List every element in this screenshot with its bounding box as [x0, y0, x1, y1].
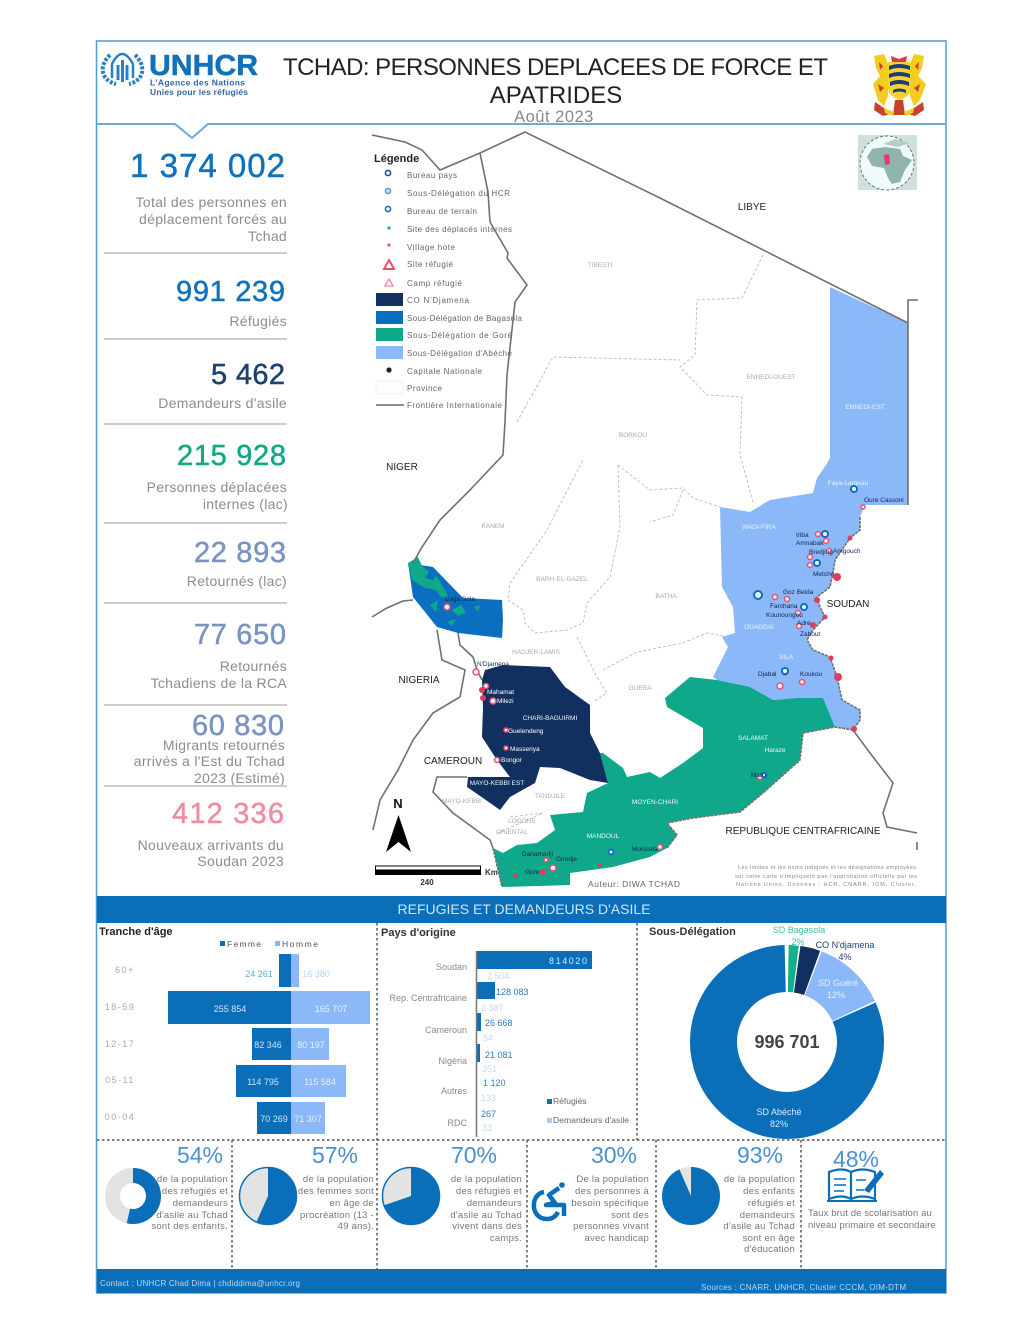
panel: 57% femmes: des femmes sont — [298, 1186, 374, 1197]
icon: open book and pen — [827, 1170, 884, 1201]
map disclaimer: sur cette carte n'impliquent pas l'approbation officielle par les — [735, 874, 917, 880]
bar values: 80 197 — [297, 1040, 325, 1050]
stat: migrants retournés: 60 830 — [192, 710, 284, 742]
header — [97, 50, 946, 138]
donut labels: 2% — [791, 937, 805, 947]
donut labels: 12% — [827, 990, 845, 1000]
panel: 48% scolarisation: 48% — [833, 1146, 879, 1172]
age labels — [105, 965, 135, 1122]
title: TCHAD: PERSONNES DEPLACEES DE FORCE ET — [283, 54, 828, 81]
header rule with chevron — [97, 124, 946, 138]
map disclaimer: Nations Unies. Données : HCR, CNARR, IOM, Cluster. — [736, 882, 916, 888]
title: APATRIDES — [490, 82, 622, 109]
stat: total: déplacement forcés au — [139, 211, 287, 227]
panel: 93% éducation: d'asile au Tchad — [723, 1221, 795, 1232]
bar values: 26 668 — [485, 1018, 513, 1028]
stat: personnes déplacées internes — [147, 440, 288, 512]
province labels: MAYO-KEBBI EST — [470, 780, 524, 787]
donut labels: SD Guéré — [818, 978, 858, 988]
age labels: 18-59 — [105, 1002, 135, 1012]
chart legend: Femme — [227, 939, 261, 949]
province labels: WADI-FIRA — [742, 524, 777, 531]
stat: retournés RCA — [151, 619, 287, 691]
chart: pays d'origine — [381, 927, 629, 1137]
country labels: Nigéria — [438, 1056, 467, 1066]
region: Sous-Délégation de Goré — [493, 677, 835, 887]
town labels: Gondje — [556, 856, 577, 863]
panel: 54% enfants: demandeurs — [173, 1198, 228, 1209]
country labels: CAMEROUN — [424, 756, 482, 767]
town labels: Koukou — [800, 671, 822, 678]
legend: Capitale Nationale — [407, 367, 483, 376]
panel: 54% enfants — [112, 1142, 228, 1232]
province labels: Faya-Largeau — [828, 480, 869, 487]
bar values — [481, 956, 587, 1133]
stat: retournés RCA: 77 650 — [194, 619, 286, 651]
panel: 30% handicap: De la population — [576, 1174, 649, 1185]
bar values: 21 081 — [485, 1050, 513, 1060]
bar values: 115 584 — [304, 1077, 336, 1087]
town labels: Djabal — [758, 671, 777, 678]
province labels: SILA — [779, 654, 794, 661]
panel: 57% femmes: en âge de — [329, 1198, 374, 1209]
legend: Village hote — [407, 243, 456, 252]
bar values: 71 307 — [294, 1114, 322, 1124]
province labels — [442, 262, 885, 840]
age labels: 60+ — [115, 965, 135, 975]
legend — [374, 153, 523, 410]
panel: 93% éducation: demandeurs — [740, 1210, 795, 1221]
donut labels: 82% — [770, 1119, 788, 1129]
country labels: SOUDAN — [827, 599, 869, 610]
panel: 70% camps: des réfugiés et — [456, 1186, 522, 1197]
panel: 30% handicap — [534, 1142, 649, 1244]
province labels: GUERA — [628, 685, 652, 692]
panel: 54% enfants: 54% — [177, 1142, 223, 1168]
country labels: Soudan — [436, 962, 467, 972]
north arrow — [386, 796, 411, 852]
icon: coat of arms of Chad — [873, 54, 926, 116]
panel: 93% éducation: d'éducation — [744, 1244, 795, 1255]
province labels: LOGONE — [508, 818, 537, 825]
scale bar: 240 — [420, 878, 434, 887]
town labels: Goz Beida — [783, 589, 814, 596]
province labels: BATHA — [655, 593, 677, 600]
region: CO N'Djamena — [467, 665, 608, 810]
panel: 93% éducation: 93% — [737, 1142, 783, 1168]
bar values: 165 707 — [315, 1004, 347, 1014]
country labels: LIBYE — [738, 202, 766, 213]
panel: 57% femmes: 57% — [312, 1142, 358, 1168]
legend: Province — [407, 384, 443, 393]
town labels — [445, 497, 904, 876]
legend: CO N'Djamena — [407, 296, 470, 305]
north arrow: N — [393, 796, 403, 811]
footer — [97, 1269, 946, 1293]
country labels: RDC — [448, 1118, 467, 1128]
town labels: Maro — [751, 772, 766, 779]
bar values: 1 120 — [483, 1078, 506, 1088]
stat: retournés lac: Retournés (lac) — [187, 573, 287, 589]
icon: UNHCR emblem — [103, 54, 142, 84]
pie chart — [662, 1167, 720, 1225]
province labels: MANDOUL — [587, 833, 620, 840]
icon: inset globe locator — [858, 135, 917, 190]
stat: réfugiés — [176, 276, 287, 329]
town labels: Goré — [525, 869, 540, 876]
province labels: OUADDAI — [744, 624, 774, 631]
legend: Site des déplacés internes — [407, 225, 512, 234]
province boundaries — [498, 255, 763, 833]
title — [283, 54, 828, 109]
stat: total — [130, 147, 287, 244]
province labels: BORKOU — [619, 432, 647, 439]
age labels: 12-17 — [105, 1039, 135, 1049]
pie chart — [240, 1168, 296, 1224]
province labels: MAYO-KEBBI — [442, 798, 482, 805]
chart: pays d'origine: Pays d'origine — [381, 927, 456, 939]
panel: 48% scolarisation: Taux brut de scolarisation au — [808, 1208, 932, 1219]
bar values: 351 — [482, 1064, 497, 1074]
country labels: NIGER — [386, 462, 418, 473]
panel: 57% femmes — [240, 1142, 374, 1232]
town labels: Amgouch — [833, 548, 861, 555]
legend: Camp réfugié — [407, 279, 463, 288]
province labels: HADJER-LAMIS — [512, 649, 560, 656]
stat: nouveaux arrivants: Nouveaux arrivants du — [138, 837, 284, 853]
panel: 30% handicap: 30% — [591, 1142, 637, 1168]
stat: migrants retournés: arrivés a l'Est du Tchad — [134, 753, 285, 769]
legend: Sous-Délégation d'Abéché — [407, 349, 513, 358]
panel: 54% enfants: des réfugiés et — [162, 1186, 228, 1197]
subtitle: Août 2023 — [514, 108, 594, 126]
panel: 30% handicap: personnes vivant — [573, 1221, 649, 1232]
bar values — [214, 969, 347, 1124]
panel: 70% camps: vivent dans des — [452, 1221, 522, 1232]
stat: demandeurs d'asile — [158, 359, 287, 411]
donut labels: SD Abéché — [756, 1107, 802, 1117]
chart legend: Homme — [282, 939, 318, 949]
panel: 48% scolarisation — [808, 1146, 936, 1231]
stat: personnes déplacées internes: Personnes déplacées — [147, 479, 287, 495]
stat: total: Total des personnes en — [136, 194, 287, 210]
stat: retournés RCA: Retournés — [220, 658, 287, 674]
stat: nouveaux arrivants — [138, 798, 284, 869]
stat: demandeurs d'asile: Demandeurs d'asile — [158, 395, 287, 411]
footer: Contact : UNHCR Chad Dima | chdiddima@unhcr.org — [100, 1279, 300, 1288]
panel: 70% camps — [382, 1142, 522, 1244]
town labels: Farchana — [770, 603, 798, 610]
stat: nouveaux arrivants: 412 336 — [172, 798, 284, 830]
region: Sous-Délégation d'Abéché — [713, 287, 908, 730]
chart legend: Demandeurs d'asile — [553, 1115, 629, 1125]
town labels: Bongor — [501, 757, 523, 764]
panel: 54% enfants: de la population — [157, 1174, 228, 1185]
panel: 93% éducation: réfugiés et — [748, 1198, 795, 1209]
chart: tranche d'âge — [99, 926, 370, 1134]
country labels — [389, 962, 467, 1128]
section banner: REFUGIES ET DEMANDEURS D'ASILE — [398, 901, 650, 917]
bar values: 114 795 — [247, 1077, 279, 1087]
horizontal bars — [476, 951, 592, 1137]
scale bar: Km — [485, 868, 498, 877]
donut total: 996 701 — [754, 1032, 820, 1052]
province labels: MOYEN-CHARI — [632, 799, 678, 806]
country labels: REPUBLIQUE CENTRAFRICAINE — [725, 826, 881, 837]
donut chart — [112, 1176, 154, 1216]
province labels: SALAMAT — [738, 735, 768, 742]
international borders — [372, 132, 918, 887]
chart: tranche d'âge: Tranche d'âge — [99, 926, 173, 938]
logo: UNHCR — [103, 50, 258, 97]
panel: 57% femmes: de la population — [303, 1174, 374, 1185]
panel: 70% camps: camps. — [490, 1233, 522, 1244]
panel: 70% camps: demandeurs — [467, 1198, 522, 1209]
legend: Site réfugié — [407, 260, 454, 269]
town labels: Oure Cassoni — [864, 497, 904, 504]
bar values: 24 261 — [245, 969, 273, 979]
stat: migrants retournés — [134, 710, 285, 786]
chart legend: Réfugiés — [553, 1096, 587, 1106]
page frame — [96, 41, 946, 1293]
stat: total: 1 374 002 — [130, 147, 285, 184]
town labels: Bredjing — [809, 549, 833, 556]
town labels: Guelendeng — [508, 728, 544, 735]
town labels: Milezi — [497, 698, 514, 705]
legend: Bureau de terrain — [407, 207, 477, 216]
stat: personnes déplacées internes: 215 928 — [177, 440, 286, 472]
region: Sous-Délégation de Bagasola — [408, 557, 503, 638]
panel: 93% éducation: des enfants — [743, 1186, 795, 1197]
panel: 30% handicap: avec handicap — [584, 1233, 649, 1244]
town labels: Baga Sola — [445, 596, 475, 603]
town labels: Amnabak — [796, 540, 824, 547]
donut labels: CO N'djamena — [816, 940, 874, 950]
province labels: Haraze — [765, 747, 786, 754]
legend: Légende — [374, 153, 419, 165]
province labels: TIBESTI — [588, 262, 612, 269]
bar values: 70 269 — [260, 1114, 288, 1124]
chart: sous-délégation donut: Sous-Délégation — [649, 926, 736, 938]
panel: key figures — [104, 147, 288, 869]
legend: Bureau pays — [407, 171, 457, 180]
scale bar — [375, 866, 498, 887]
province labels: KANEM — [481, 523, 505, 530]
town labels: Kounoungou — [766, 612, 803, 619]
pyramid bars — [168, 954, 370, 1134]
stat: total: Tchad — [248, 228, 287, 244]
legend: Sous-Délégation du HCR — [407, 189, 510, 198]
panel: 48% scolarisation: niveau primaire et secondaire — [808, 1220, 936, 1231]
town labels: Danamadji — [522, 851, 553, 858]
province labels: ENNEDI-OUEST — [746, 374, 796, 381]
bar values: 54 — [483, 1033, 493, 1043]
logo: UNHCR: L'Agence des Nations — [150, 78, 245, 88]
stat: retournés RCA: Tchadiens de la RCA — [151, 675, 287, 691]
stat: nouveaux arrivants: Soudan 2023 — [197, 853, 284, 869]
author credit: Auteur: DIWA TCHAD — [588, 879, 680, 889]
bar values: 2 387 — [481, 1003, 504, 1013]
donut labels: 4% — [838, 952, 852, 962]
donut segments — [714, 968, 860, 1116]
dividers — [97, 923, 946, 1269]
chart legend — [220, 939, 318, 949]
pie chart — [382, 1168, 440, 1224]
stat: migrants retournés: 2023 (Estimé) — [194, 770, 285, 786]
panel: 70% camps: 70% — [451, 1142, 497, 1168]
legend: Sous-Délégation de Goré — [407, 331, 513, 340]
panel: 93% éducation — [662, 1142, 795, 1255]
town labels: Massenya — [510, 746, 540, 753]
stat: réfugiés: Réfugiés — [229, 313, 287, 329]
bar values: 33 — [482, 1123, 492, 1133]
panel: 70% camps: d'asile au Tchad — [450, 1210, 522, 1221]
stat: migrants retournés: Migrants retournés — [163, 737, 285, 753]
stat: retournés lac — [187, 537, 287, 589]
donut labels — [756, 925, 874, 1129]
province labels: TANDJILE — [535, 793, 566, 800]
logo: UNHCR: UNHCR — [149, 50, 258, 82]
town labels: Metché — [813, 571, 835, 578]
stat: réfugiés: 991 239 — [176, 276, 285, 308]
panel: 57% femmes: 49 ans). — [338, 1221, 374, 1232]
bar values: 128 083 — [496, 987, 529, 997]
legend: Frontière Internationale — [407, 401, 503, 410]
country labels: Autres — [441, 1086, 467, 1096]
site markers — [444, 505, 865, 871]
icon: wheelchair — [534, 1182, 565, 1219]
bar values: 82 346 — [254, 1040, 282, 1050]
map disclaimer: Les limites et les noms indiqués et les désignations employées — [738, 865, 916, 871]
panel: 70% camps: de la population — [451, 1174, 522, 1185]
country labels — [386, 202, 881, 837]
panel: 93% éducation: sont en âge — [743, 1233, 795, 1244]
panel: 93% éducation: de la population — [724, 1174, 795, 1185]
town labels: Mahamat — [487, 689, 514, 696]
map — [372, 132, 918, 889]
legend: Sous-Délégation de Bagasola — [407, 314, 523, 323]
panel: 54% enfants: d'asile au Tchad — [156, 1210, 228, 1221]
country labels: NIGERIA — [398, 675, 440, 686]
town labels: Zabout — [800, 631, 820, 638]
donut labels: SD Bagasola — [773, 925, 825, 935]
bar values: 814020 — [549, 956, 587, 966]
bar values: 133 — [481, 1093, 496, 1103]
map disclaimer — [735, 865, 917, 888]
bar values: 2 504 — [487, 971, 510, 981]
panel: 30% handicap: sont des — [611, 1210, 649, 1221]
stat: retournés lac: 22 893 — [194, 537, 286, 569]
panel: 30% handicap: des personnes à — [575, 1186, 649, 1197]
age labels: 05-11 — [105, 1075, 135, 1085]
province labels: ENNEDI-EST — [845, 404, 885, 411]
section banner — [97, 896, 946, 923]
logo: UNHCR: Unies pour les réfugiés — [150, 87, 248, 97]
province labels: CHARI-BAGUIRMI — [523, 715, 577, 722]
footer: Sources : CNARR, UNHCR, Cluster CCCM, OIM-DTM — [701, 1283, 906, 1292]
bar values: 16 380 — [302, 969, 330, 979]
stat: demandeurs d'asile: 5 462 — [211, 359, 285, 391]
bar values: 255 854 — [214, 1004, 246, 1014]
town labels: N'Djamena — [477, 661, 509, 668]
town labels: Adré — [797, 620, 811, 627]
province labels: BARH-EL-GAZEL — [536, 576, 588, 583]
province labels: ORIENTAL — [496, 829, 528, 836]
chart legend — [547, 1096, 629, 1125]
bar values: 267 — [481, 1109, 496, 1119]
stat: personnes déplacées internes: internes (lac) — [203, 496, 288, 512]
country labels: Rep. Centrafricaine — [389, 993, 467, 1003]
panel: 57% femmes: procréation (13 - — [300, 1210, 374, 1221]
town labels: Iriba — [796, 532, 809, 539]
panel: 54% enfants: sont des enfants. — [151, 1221, 228, 1232]
panel: 30% handicap: besoin spécifique — [571, 1198, 649, 1209]
country labels: Cameroun — [425, 1025, 467, 1035]
age labels: 00-04 — [105, 1112, 135, 1122]
chart: sous-délégation donut — [649, 925, 874, 1129]
town labels: Moissala — [632, 846, 658, 853]
